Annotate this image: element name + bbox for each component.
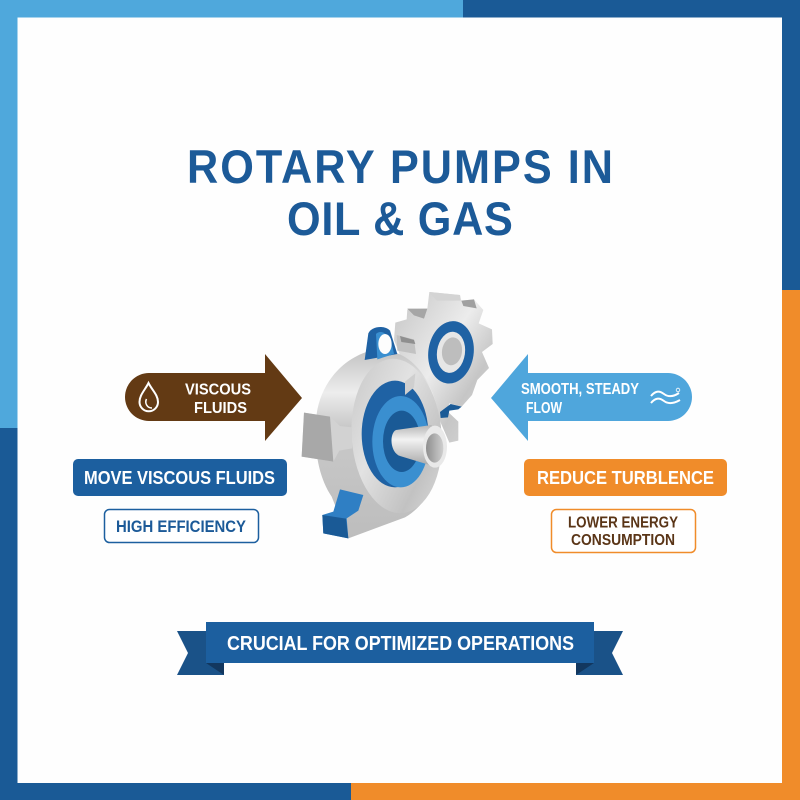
label: lower energy consumption (552, 510, 696, 552)
label: move viscous fluids: MOVE VISCOUS FLUIDS (84, 467, 275, 488)
label: move viscous fluids (73, 459, 287, 496)
arrow: viscous fluids (125, 354, 302, 441)
label: high efficiency (104, 510, 258, 542)
lifting lug (365, 327, 397, 360)
rotary pump illustration (302, 292, 493, 538)
pump foot (322, 489, 363, 538)
arrow: viscous fluids: FLUIDS (194, 400, 247, 417)
arrow: viscous fluids: VISCOUS (185, 382, 251, 398)
ribbon banner: CRUCIAL FOR OPTIMIZED OPERATIONS (227, 633, 574, 655)
label: reduce turblence (524, 459, 727, 496)
icon: waves (651, 388, 680, 403)
shaft (391, 425, 447, 468)
label: high efficiency: HIGH EFFICIENCY (116, 518, 246, 536)
blue flange rings (362, 373, 429, 487)
label: reduce turblence: REDUCE TURBLENCE (537, 467, 714, 488)
arrow: smooth steady flow (491, 354, 692, 441)
title: OIL & GAS (287, 192, 513, 245)
label: lower energy consumption: LOWER ENERGY (568, 514, 679, 532)
label: lower energy consumption: CONSUMPTION (571, 532, 675, 549)
pump housing (302, 351, 447, 538)
arrow: smooth steady flow: FLOW (526, 400, 562, 417)
ribbon banner (177, 622, 623, 675)
icon: oil drop (140, 383, 158, 411)
gear (394, 292, 493, 443)
title: ROTARY PUMPS IN (187, 140, 613, 193)
title (187, 140, 613, 245)
arrow: smooth steady flow: SMOOTH, STEADY (521, 381, 640, 398)
